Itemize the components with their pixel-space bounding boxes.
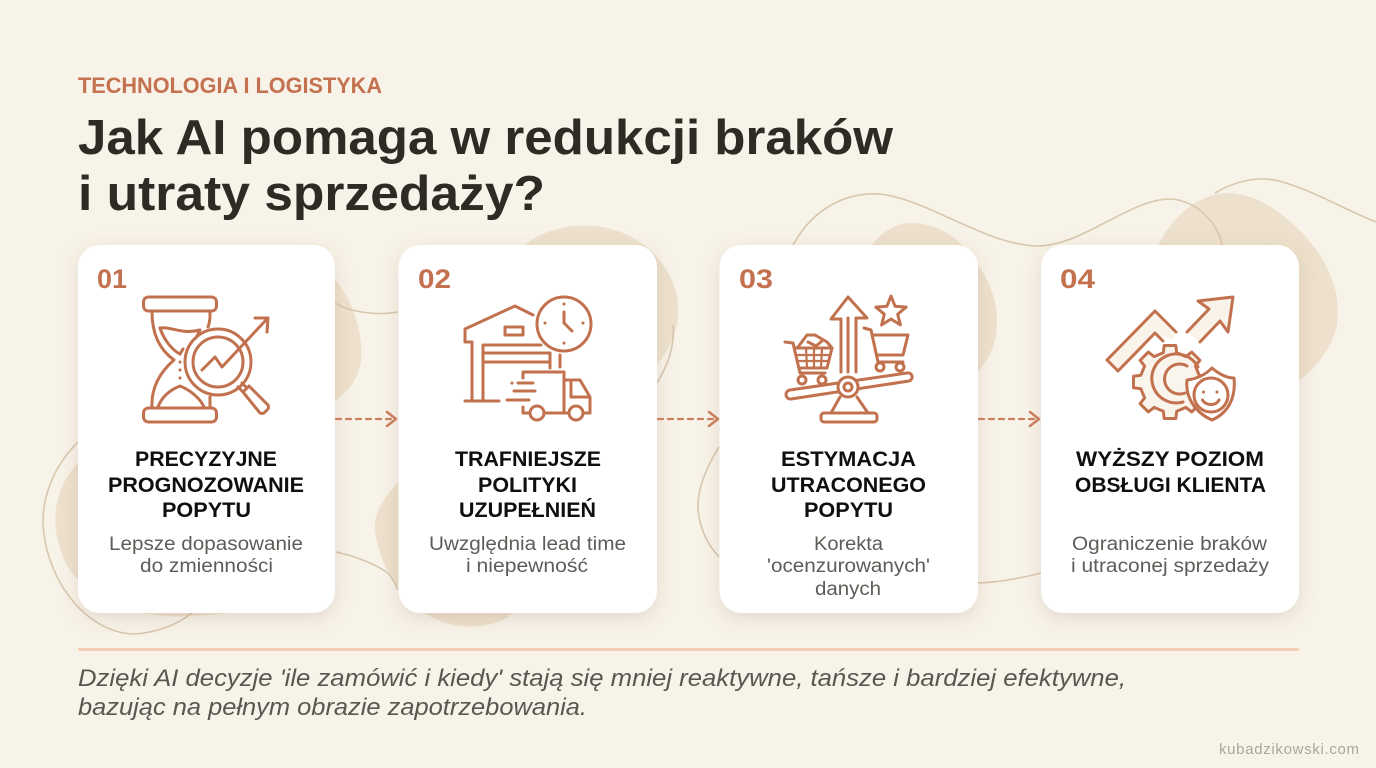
heading: PROGNOZOWANIE [108,474,304,497]
panel: card 3 [720,245,978,613]
heading: POLITYKI [478,474,577,497]
heading: PRECYZYJNE [135,448,277,471]
heading: POPYTU [804,499,893,522]
panel: card 1 [78,245,335,613]
heading: UZUPEŁNIEŃ [459,499,596,522]
decorative blobs [55,193,1338,627]
watermark: kubadzikowski.com [1219,741,1359,758]
description: Uwzględnia lead time [429,534,626,555]
description: Lepsze dopasowanie [109,534,303,555]
decorative lines [43,179,1376,634]
description: do zmienności [140,556,273,577]
heading: WYŻSZY POZIOM [1076,448,1264,471]
title: i utraty sprzedaży? [78,167,545,221]
panel: card 2 [398,245,657,613]
number 03: 03 [739,264,773,294]
heading: TRAFNIEJSZE [455,448,601,471]
description [767,534,930,600]
description [429,534,626,577]
conclusion text: Dzięki AI decyzje 'ile zamówić i kiedy' stają się mniej reaktywne, tańsze i bardziej efektywne, [78,665,1126,692]
arrow: card 2 to 3 [658,412,718,426]
description [1071,534,1270,577]
heading [455,448,601,522]
divider [78,648,1299,651]
icon: warehouse, clock and truck [465,297,591,420]
description: i niepewność [466,556,588,577]
heading: OBSŁUGI KLIENTA [1075,474,1266,497]
title: Jak AI pomaga w redukcji braków [78,111,894,165]
eyebrow: TECHNOLOGIA I LOGISTYKA [78,73,382,98]
heading: POPYTU [162,499,251,522]
description: i utraconej sprzedaży [1071,556,1270,577]
panel: card 4 [1041,245,1299,613]
description: 'ocenzurowanych' [767,556,930,577]
conclusion text: bazując na pełnym obrazie zapotrzebowania. [78,694,587,721]
heading [771,448,926,522]
number 02: 02 [418,264,451,294]
heading: UTRACONEGO [771,474,926,497]
icon: gear, growth arrow and smiling shield [1107,297,1234,420]
number 01: 01 [97,264,127,294]
title [78,111,894,221]
icon: scale with carts, arrow and star [785,296,912,422]
arrow: card 3 to 4 [979,412,1039,426]
description: danych [815,579,881,600]
heading [1075,448,1266,497]
conclusion text [78,665,1126,721]
arrow: card 1 to 2 [336,412,396,426]
heading [108,448,304,522]
icon: hourglass with magnifier [144,297,268,422]
heading: ESTYMACJA [781,448,916,471]
description [109,534,303,577]
description: Korekta [814,534,883,555]
number 04: 04 [1060,264,1095,294]
description: Ograniczenie braków [1072,534,1267,555]
